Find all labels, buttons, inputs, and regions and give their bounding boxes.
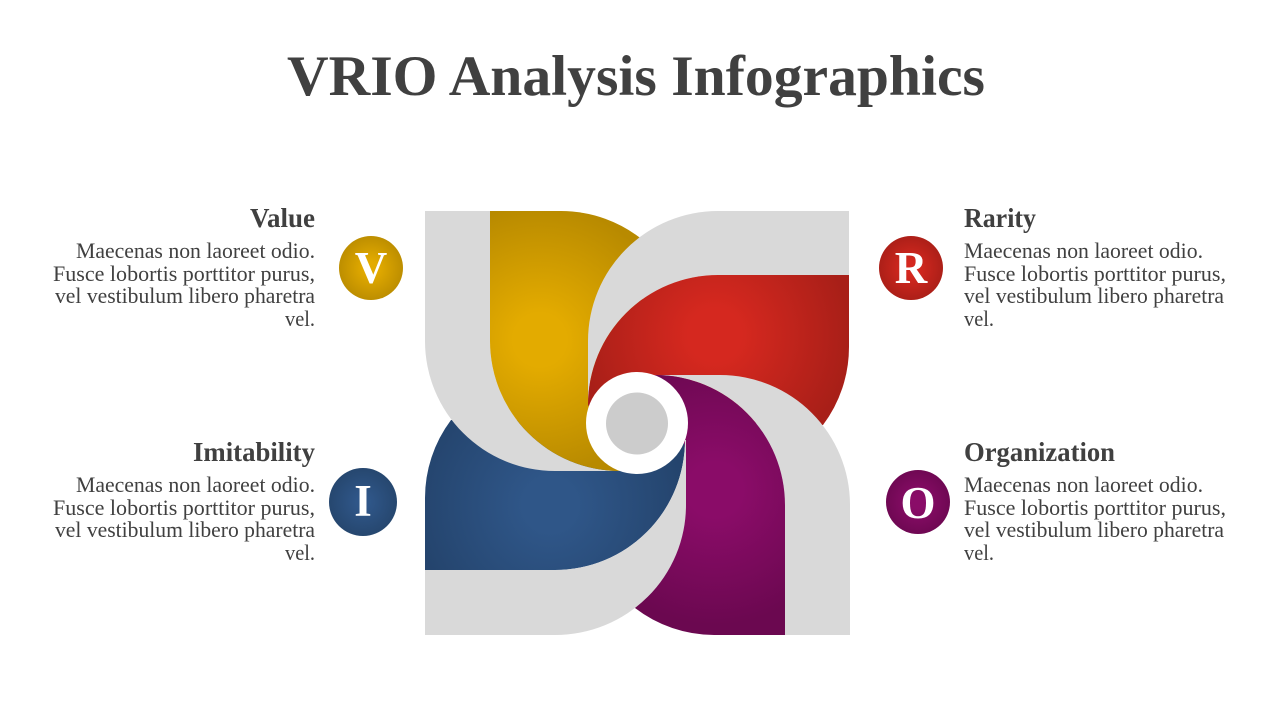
icon: O badge: O [900, 478, 936, 528]
text: rarity description: Fusce lobortis porttitor purus, [964, 261, 1226, 286]
block: imitability [53, 437, 397, 565]
text: value description: vel. [285, 306, 315, 331]
block: rarity [879, 203, 1226, 331]
heading: rarity: Rarity [964, 203, 1036, 233]
block: organization [886, 437, 1226, 565]
band: organization grey [655, 375, 850, 635]
icon: I badge: I [354, 476, 372, 526]
heading: imitability: Imitability [193, 437, 315, 467]
text: imitability description: Maecenas non laoreet odio. [76, 472, 315, 497]
icon: O badge [886, 470, 950, 534]
title: VRIO Analysis Infographics [287, 45, 985, 108]
heading: organization: Organization [964, 437, 1115, 467]
text: value description [53, 238, 315, 331]
text: organization description: Fusce lobortis porttitor purus, [964, 495, 1226, 520]
centre ring [586, 372, 688, 474]
text: rarity description: vel vestibulum libero pharetra [964, 283, 1224, 308]
pinwheel diagram [425, 211, 850, 635]
icon: I badge [329, 468, 397, 536]
text: rarity description: vel. [964, 306, 994, 331]
icon: V badge [339, 236, 403, 300]
block: value [53, 203, 403, 331]
band: rarity grey [588, 211, 849, 405]
text: rarity description: Maecenas non laoreet odio. [964, 238, 1203, 263]
text: organization description: Maecenas non laoreet odio. [964, 472, 1203, 497]
petal: rarity red [588, 275, 849, 425]
text: value description: Fusce lobortis porttitor purus, [53, 261, 315, 286]
petal: imitability blue [425, 420, 685, 570]
text: imitability description: vel. [285, 540, 315, 565]
text: imitability description: Fusce lobortis porttitor purus, [53, 495, 315, 520]
text: organization description: vel. [964, 540, 994, 565]
band: imitability grey [425, 440, 686, 635]
text: imitability description [53, 472, 315, 565]
text: organization description [964, 472, 1226, 565]
text: value description: Maecenas non laoreet odio. [76, 238, 315, 263]
icon: V badge: V [355, 243, 387, 293]
petal: value gold [490, 211, 644, 471]
centre dot [606, 392, 668, 454]
icon: R badge: R [895, 243, 928, 293]
petal: organization purple [635, 375, 785, 635]
text: rarity description [964, 238, 1226, 331]
band: value grey [425, 211, 620, 471]
heading: value: Value [250, 203, 315, 233]
text: value description: vel vestibulum libero pharetra [55, 283, 315, 308]
text: organization description: vel vestibulum libero pharetra [964, 517, 1224, 542]
icon: R badge [879, 236, 943, 300]
text: imitability description: vel vestibulum libero pharetra [55, 517, 315, 542]
